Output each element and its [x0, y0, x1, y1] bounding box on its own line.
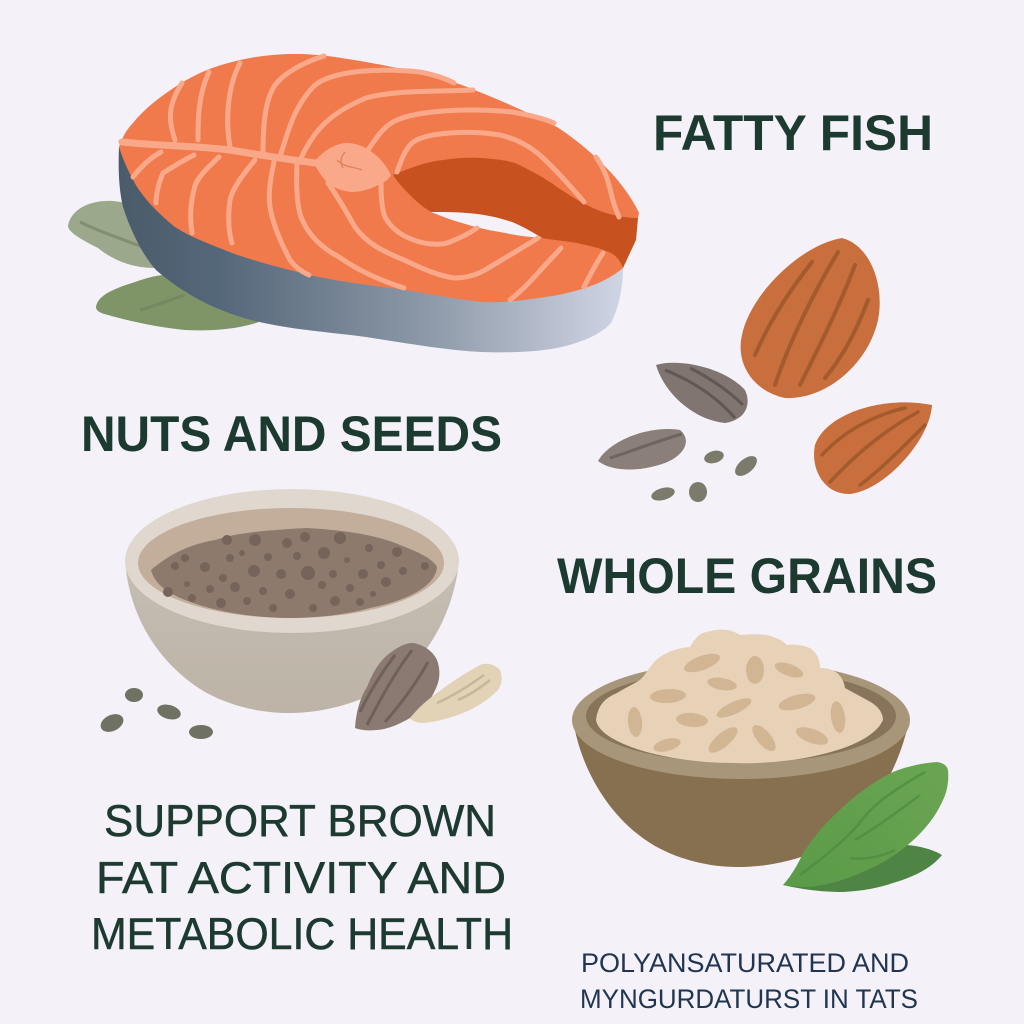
bowl rim [125, 489, 459, 633]
icon: leaves behind salmon [68, 201, 259, 330]
text: fat types caption: POLYANSATURATED AND [581, 948, 909, 978]
grain mound [596, 630, 883, 763]
heading: fatty fish: FATTY FISH [653, 105, 933, 161]
illustration: almonds and seeds [598, 238, 932, 503]
text: brown fat statement: METABOLIC HEALTH [91, 910, 513, 959]
text: brown fat statement: SUPPORT BROWN [104, 797, 496, 846]
illustration: salmon steak with leaves [68, 54, 639, 352]
text: fat types caption [580, 948, 918, 1014]
ground seed fill [151, 528, 437, 618]
seed speckles [163, 532, 429, 612]
icon: large almond [741, 238, 880, 398]
icon: seed left [598, 429, 686, 470]
icon: lower leaf [783, 845, 942, 892]
bowl body [126, 570, 458, 713]
icon: seed top [656, 363, 748, 423]
icon: green leaf [783, 762, 948, 887]
salmon inner cavity [393, 158, 638, 268]
illustration: seed bowl [98, 489, 502, 739]
salmon fat lines [122, 56, 619, 300]
text: brown fat statement [91, 797, 513, 959]
icon: small almond [814, 402, 932, 494]
bowl rim [572, 661, 910, 779]
heading: whole grains: WHOLE GRAINS [557, 548, 937, 604]
white gap in salmon [431, 212, 542, 238]
text: brown fat statement: FAT ACTIVITY AND [96, 854, 506, 903]
icon: dark seed [355, 643, 439, 730]
illustration: grain bowl [572, 630, 948, 892]
salmon cut surface [119, 54, 639, 302]
text: fat types caption: MYNGURDATURST IN TATS [580, 984, 918, 1014]
small seeds [650, 449, 760, 503]
salmon centre spine [314, 143, 391, 192]
heading: nuts and seeds: NUTS AND SEEDS [81, 406, 502, 462]
individual grains [627, 650, 847, 757]
leaf veins [800, 772, 925, 875]
small seeds [98, 688, 213, 739]
bowl inner wall [138, 508, 444, 618]
bowl body [574, 725, 908, 867]
salmon skin side [119, 147, 623, 352]
bowl inner wall [586, 669, 896, 763]
icon: pale seed [410, 664, 502, 723]
